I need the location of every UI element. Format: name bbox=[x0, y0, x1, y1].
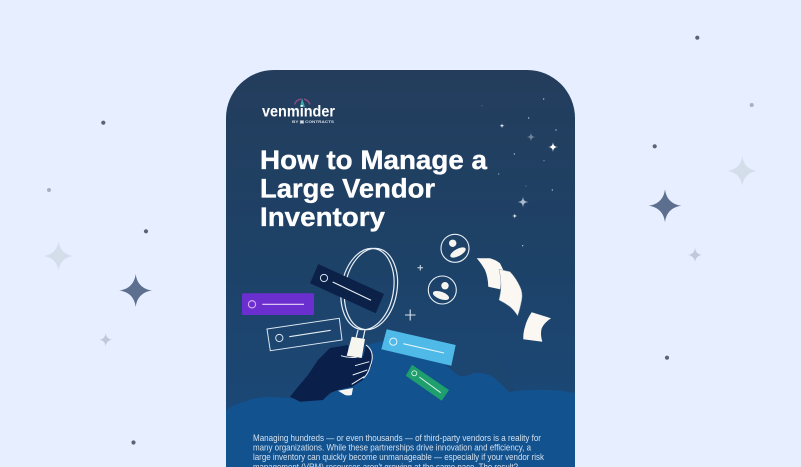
sky stars bbox=[482, 98, 558, 246]
magnifying glass bbox=[340, 248, 398, 339]
flying papers bbox=[477, 258, 551, 342]
plus sparkles bbox=[405, 265, 423, 320]
intro paragraph bbox=[253, 433, 544, 467]
title bbox=[260, 145, 487, 232]
title: How to Manage a bbox=[260, 145, 487, 175]
logo: venminder bbox=[262, 104, 335, 120]
record card: outline bbox=[267, 318, 342, 351]
intro paragraph: Managing hundreds — or even thousands — of third-party vendors is a reality for bbox=[253, 433, 541, 443]
background stars and dots, right bbox=[648, 36, 757, 360]
logo bbox=[262, 98, 335, 124]
title: Large Vendor bbox=[260, 174, 435, 204]
user badge top bbox=[441, 234, 469, 262]
hand holding magnifier bbox=[290, 337, 373, 402]
record card: light blue bbox=[381, 329, 456, 366]
background stars and dots, left bbox=[44, 121, 152, 445]
user badge lower bbox=[428, 276, 456, 304]
record card: green bbox=[406, 365, 449, 401]
document card bbox=[226, 70, 575, 467]
record card: navy bbox=[310, 264, 384, 313]
title: Inventory bbox=[260, 202, 385, 232]
record card: purple bbox=[242, 293, 314, 315]
logo: BY ▣ CONTRACTS bbox=[292, 120, 335, 124]
front cloud bbox=[226, 341, 575, 467]
back cloud bbox=[455, 352, 515, 395]
intro paragraph: many organizations. While these partnerships drive innovation and efficiency, a bbox=[253, 442, 532, 452]
intro paragraph: large inventory can quickly become unmanageable — especially if your vendor risk bbox=[253, 452, 544, 462]
